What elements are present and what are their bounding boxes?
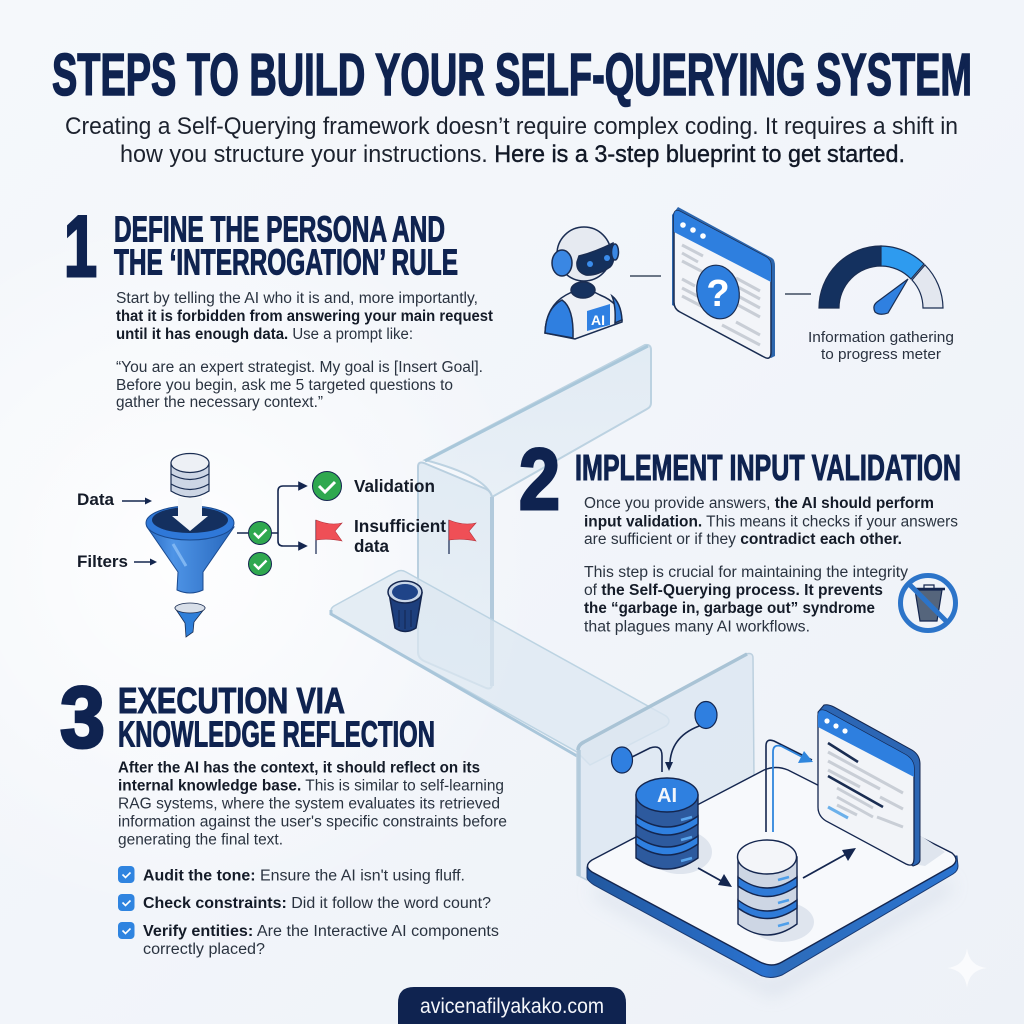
- body text 3: RAG systems, where the system evaluates its retrieved: [118, 796, 500, 812]
- label: Insufficient data: data: [354, 536, 389, 556]
- footer pill: avicenafilyakako.com: [420, 995, 604, 1018]
- arrow: storage to window: [803, 848, 856, 878]
- icon: storage database: [738, 840, 797, 935]
- body text 3: internal knowledge base. This is similar to self-learning: [118, 778, 504, 794]
- body text 2: that plagues many AI workflows.: [584, 618, 810, 636]
- item: verify entities: [143, 923, 499, 958]
- step number 2: 2: [519, 432, 560, 528]
- arrow: data: [122, 498, 152, 504]
- body text 2: of the Self-Querying process. It prevents: [584, 582, 883, 599]
- body text 2: input validation. This means it checks if your answers: [584, 514, 958, 530]
- meter caption: [808, 329, 954, 363]
- icon: red flag second: [449, 520, 476, 554]
- icon: node circles and arrows: [612, 702, 717, 773]
- body text 1: gather the necessary context.”: [116, 394, 323, 411]
- icon: progress meter: [819, 246, 943, 314]
- item: audit the tone: Audit the tone: Ensure the AI isn't using fluff.: [143, 868, 465, 884]
- label: Validation: Validation: [354, 476, 435, 496]
- body text 2: the “garbage in, garbage out” syndrome: [584, 600, 875, 617]
- heading 3: [118, 680, 435, 754]
- glass panel: upper: [425, 345, 651, 497]
- heading 1: [114, 208, 458, 282]
- body text 3: generating the final text.: [118, 832, 283, 848]
- step number 1: 1: [64, 199, 97, 295]
- connector line: robot to window: [630, 275, 661, 277]
- heading 1: DEFINE THE PERSONA AND: [114, 208, 445, 250]
- funnel diagram: [77, 454, 476, 637]
- icon: trash can on shelf: [388, 581, 422, 632]
- section 3: knowledge reflection: [60, 670, 507, 958]
- icon: check small lower: [248, 552, 272, 576]
- icon: result window: [818, 705, 920, 866]
- arrows: up to result window: [766, 740, 813, 832]
- label: Insufficient data: [354, 516, 446, 556]
- checklist: [118, 866, 499, 958]
- glass connector structure: [331, 345, 754, 880]
- connector line: window to meter: [785, 293, 811, 295]
- icon: database: [171, 454, 209, 497]
- platform shadow: [595, 880, 950, 995]
- icon: AI database: [636, 778, 698, 869]
- icon: small funnel: [175, 603, 205, 637]
- icon: no garbage: [900, 576, 956, 630]
- icon: AI database: AI: [657, 785, 677, 807]
- body text 2: Once you provide answers, the AI should perform: [584, 495, 934, 512]
- shadows on platform: [648, 830, 945, 942]
- body text 3: [118, 760, 507, 848]
- icon: AI robot: AI: [591, 312, 605, 328]
- platform base: [587, 768, 958, 978]
- body text 1: “You are an expert strategist. My goal is [Insert Goal].: [116, 359, 483, 376]
- subtitle: Creating a Self-Querying framework doesn’t require complex coding. It requires a shift in: [65, 113, 958, 140]
- meter caption: Information gathering: [808, 329, 954, 346]
- arrow: filters: [134, 558, 157, 566]
- icon: AI robot: [545, 227, 622, 339]
- heading 3: EXECUTION VIA: [118, 680, 345, 721]
- body text 1: until it has enough data. Use a prompt like:: [116, 326, 413, 343]
- icon: red flag: [316, 520, 342, 554]
- body text 1: [116, 290, 493, 411]
- icon: checkbox 3: [118, 922, 134, 939]
- glass panel: vertical: [418, 462, 492, 688]
- icon: checkbox 1: [118, 866, 134, 883]
- item: check constraints: Check constraints: Did it follow the word count?: [143, 895, 491, 912]
- section 1: persona and interrogation rule: [64, 199, 493, 411]
- icon: funnel: [146, 498, 234, 593]
- section 2: input validation: [519, 432, 961, 636]
- glass panel: lower shelf: [331, 570, 669, 765]
- heading 3: KNOWLEDGE REFLECTION: [118, 714, 435, 754]
- footer pill: [398, 987, 626, 1024]
- body text 1: that it is forbidden from answering your main request: [116, 308, 493, 325]
- body text 1: Before you begin, ask me 5 targeted questions to: [116, 377, 453, 394]
- meter caption: to progress meter: [821, 346, 941, 363]
- arrow: AI database to storage: [698, 868, 732, 887]
- subtitle: [65, 113, 958, 168]
- subtitle: how you structure your instructions. Here is a 3-step blueprint to get started.: [120, 141, 905, 168]
- icon: question window: ?: [706, 273, 730, 315]
- label: Data: Data: [77, 490, 115, 509]
- label: Insufficient data: Insufficient: [354, 516, 446, 536]
- body text 1: Start by telling the AI who it is and, more importantly,: [116, 290, 478, 307]
- label: Filters: Filters: [77, 552, 128, 571]
- body text 3: After the AI has the context, it should reflect on its: [118, 760, 480, 776]
- heading 1: THE ‘INTERROGATION’ RULE: [114, 242, 458, 282]
- flow lines and arrows: [237, 482, 306, 550]
- icon: sparkle watermark: [947, 948, 987, 988]
- icon: question window: [672, 207, 775, 358]
- body text 2: are sufficient or if they contradict each other.: [584, 531, 902, 548]
- isometric data platform: [587, 702, 958, 995]
- item: verify entities: correctly placed?: [143, 941, 265, 958]
- body text 3: information against the user's specific constraints before: [118, 814, 507, 830]
- body text 2: [584, 495, 958, 636]
- item: verify entities: Verify entities: Are the Interactive AI components: [143, 923, 499, 940]
- icon: checkbox 2: [118, 894, 134, 911]
- step number 3: 3: [60, 670, 105, 766]
- body text 2: This step is crucial for maintaining the integrity: [584, 564, 908, 581]
- icon: check small upper: [248, 522, 272, 544]
- glass panel: right behind platform: [577, 654, 754, 880]
- icon: check large: [312, 472, 342, 500]
